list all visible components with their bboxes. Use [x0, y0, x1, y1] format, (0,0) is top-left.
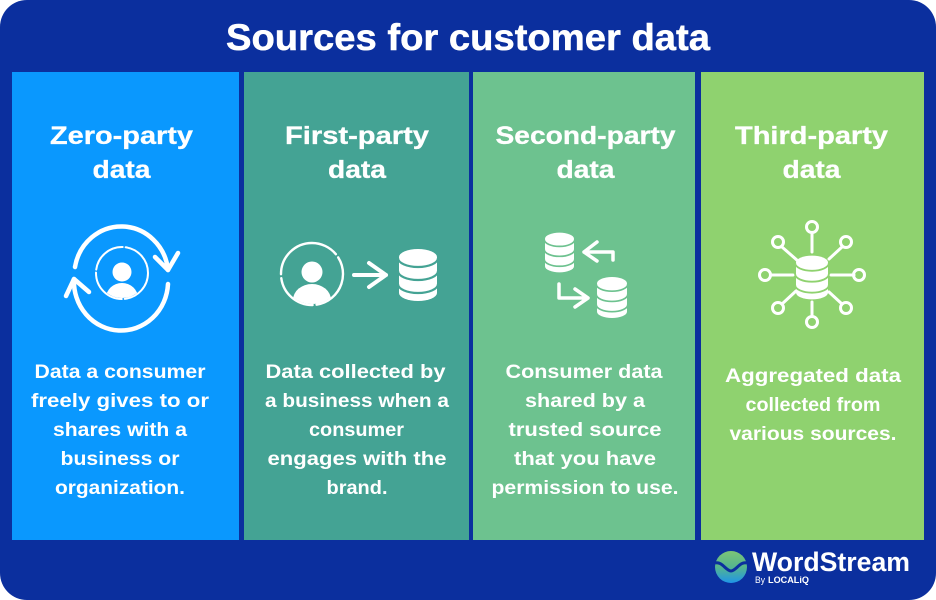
description: second-party data: permission to use.	[492, 477, 678, 499]
panel: first-party data	[244, 72, 469, 540]
byline: By	[755, 575, 765, 585]
description: first-party data: brand.	[326, 477, 388, 499]
description: first-party data: engages with the	[268, 448, 447, 470]
description: zero-party data: organization.	[55, 477, 185, 499]
description: zero-party data: shares with a	[53, 419, 187, 441]
icon: exchange between databases	[544, 233, 628, 318]
heading: second-party data: data	[556, 156, 616, 184]
byline: LOCALiQ	[768, 575, 809, 585]
wordmark: WordStream	[752, 547, 910, 577]
description: zero-party data: freely gives to or	[31, 390, 209, 412]
panel: second-party data	[473, 72, 695, 540]
description: second-party data: shared by a	[525, 390, 645, 412]
heading: third-party data	[735, 122, 888, 184]
heading: zero-party data: data	[92, 156, 152, 184]
heading: first-party data: data	[328, 156, 387, 184]
logo: WordStream by LocaliQ	[715, 547, 910, 585]
description: zero-party data: business or	[60, 448, 180, 470]
description: zero-party data: Data a consumer	[34, 361, 206, 383]
panel: third-party data	[701, 72, 924, 540]
heading: first-party data	[285, 122, 429, 184]
description: second-party data: Consumer data	[506, 361, 663, 383]
description: first-party data: a business when a	[265, 390, 449, 412]
icon: person to database	[280, 242, 437, 306]
heading: zero-party data: Zero-party	[50, 122, 193, 150]
description: third-party data: collected from	[746, 394, 880, 416]
icon: logo wave	[715, 551, 747, 583]
description: second-party data: that you have	[514, 448, 656, 470]
icon: database with connected nodes	[760, 222, 864, 328]
heading: third-party data: data	[782, 156, 842, 184]
description: first-party data: consumer	[309, 419, 404, 441]
description: first-party data: Data collected by	[266, 361, 446, 383]
title: Sources for customer data	[226, 17, 710, 58]
description: second-party data	[492, 361, 678, 499]
description: first-party data	[265, 361, 449, 499]
heading: third-party data: Third-party	[735, 122, 888, 150]
panel: zero-party data	[12, 72, 239, 540]
description: second-party data: trusted source	[508, 419, 662, 441]
description: third-party data	[725, 365, 901, 445]
description: third-party data: Aggregated data	[725, 365, 901, 387]
heading: first-party data: First-party	[285, 122, 429, 150]
description: zero-party data	[31, 361, 209, 499]
description: third-party data: various sources.	[730, 423, 896, 445]
heading: second-party data	[496, 122, 676, 184]
heading: second-party data: Second-party	[496, 122, 676, 150]
heading: zero-party data	[50, 122, 193, 184]
icon: person with cycle arrows	[66, 226, 178, 331]
